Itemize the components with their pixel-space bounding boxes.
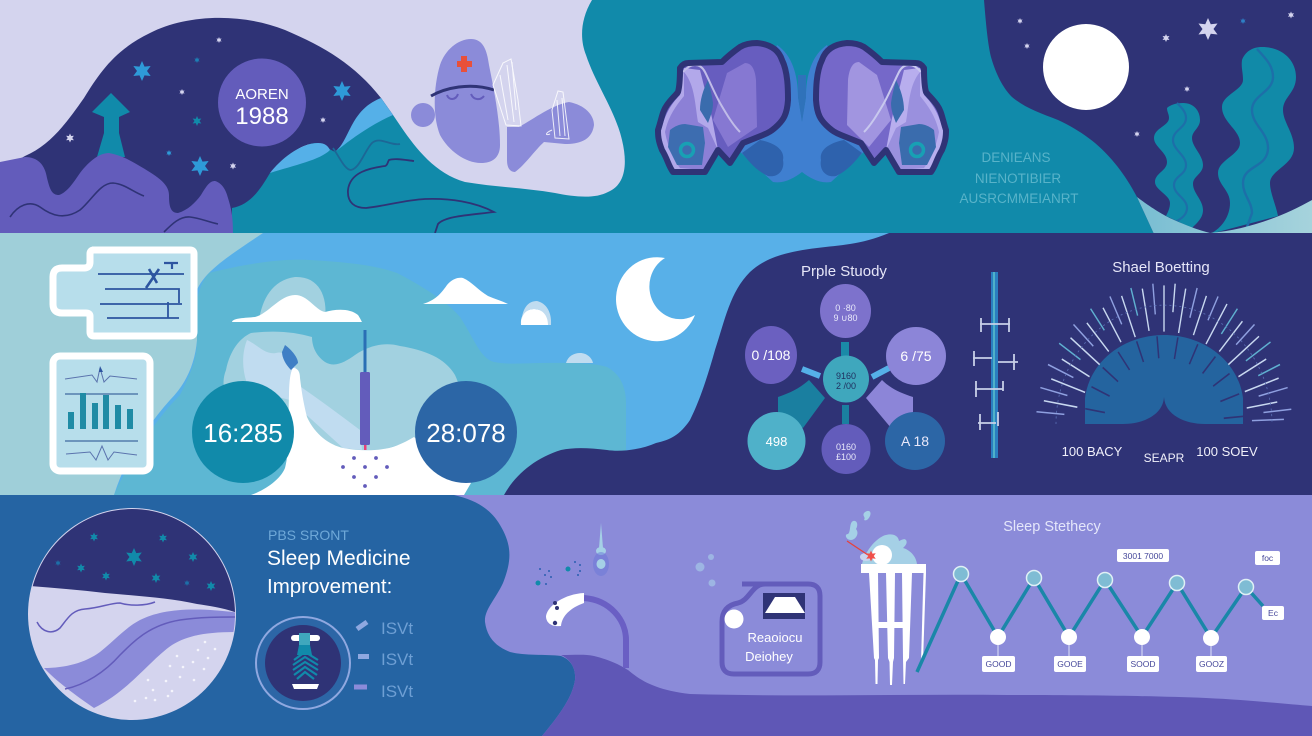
hill contour lines (10, 183, 218, 232)
stars (66, 37, 351, 176)
chart tag labels: 3001 7000 (1123, 551, 1163, 561)
icon: tower with cloud (846, 511, 926, 685)
icon: arch with white crescent (546, 593, 626, 668)
pale left region (0, 233, 263, 495)
icon: sleeping head (411, 39, 594, 172)
mid blue region (114, 260, 626, 495)
list of three items: ISVt (381, 619, 413, 638)
navy right panel (504, 233, 1312, 495)
heading: purple study: Prple Stuody (801, 263, 887, 280)
night sky stars (1017, 12, 1294, 137)
faint caption: DENIEANS (981, 150, 1051, 165)
node bottom centre: 0160 (836, 442, 856, 452)
list of three items (354, 619, 413, 701)
white body (251, 368, 471, 495)
left lobe (658, 43, 788, 172)
year badge (218, 58, 306, 146)
icon: lungs (658, 43, 946, 182)
chart tag labels: SOOD (1130, 659, 1156, 669)
node left (745, 326, 797, 384)
faint caption (959, 150, 1079, 206)
node left: 0 /108 (752, 347, 791, 363)
metric circle right (415, 381, 517, 483)
text block: sleep medicine: Improvement: (267, 575, 392, 598)
gauge labels: 100 SOEV (1196, 444, 1258, 459)
rays (1036, 284, 1291, 424)
list of three items: ISVt (381, 682, 413, 701)
teal arrow (92, 93, 130, 157)
node top: 9 ∪80 (833, 313, 858, 323)
icon: full moon (1043, 24, 1129, 110)
text block: sleep medicine: PBS SRONT (268, 527, 349, 543)
light teal dune (1137, 197, 1312, 234)
icon: ring with bottle (256, 617, 350, 709)
year badge: 1988 (235, 103, 289, 130)
lungs back shape (738, 45, 866, 182)
blue region (0, 495, 575, 736)
clouds (232, 278, 550, 325)
node bottom right (885, 412, 945, 470)
card: report (722, 584, 820, 674)
dome (1085, 335, 1243, 424)
network diagram (745, 284, 946, 474)
chart tag labels: GOOE (1057, 659, 1083, 669)
vertical scale (973, 272, 1018, 458)
bar chart panel (53, 356, 150, 471)
node centre (823, 356, 869, 402)
teal hill lines (333, 140, 494, 233)
purple foreground hills (0, 153, 233, 234)
pale blob (224, 277, 462, 470)
panel: top row night landscape (0, 0, 1312, 234)
node right: 6 /75 (900, 348, 932, 364)
heading: sleep strategy: Sleep Stethecy (1003, 519, 1102, 535)
connectors (778, 342, 913, 428)
node right (886, 327, 946, 385)
right lobe (816, 43, 946, 172)
lighter wing shape (243, 340, 362, 450)
card: report: Reaoiocu (748, 630, 802, 645)
lavender sky background (0, 0, 625, 197)
metric circle left (192, 381, 294, 483)
heading: gauge: Shael Boetting (1112, 259, 1210, 276)
node top: 0 ·80 (835, 303, 856, 313)
faint caption: NIENOTIBIER (975, 171, 1061, 186)
year badge: AOREN (235, 86, 289, 103)
icon: probe with dots (341, 330, 389, 488)
gauge labels (1062, 444, 1258, 465)
node bottom centre (822, 424, 870, 474)
icon: crescent moon (616, 257, 695, 341)
navy night sky (984, 0, 1312, 234)
node bottom left: 498 (766, 434, 787, 449)
navy hill (0, 18, 393, 234)
light blue ridge (270, 98, 393, 173)
icon: feather tip (282, 345, 298, 370)
card: report: Deiohey (745, 649, 793, 664)
node bottom centre: £100 (836, 452, 856, 462)
text block: sleep medicine: Sleep Medicine (267, 547, 411, 570)
panel: middle row sky and metrics (0, 233, 1312, 495)
chart tag labels: GOOZ (1199, 659, 1224, 669)
zigzag line chart (917, 549, 1284, 672)
seaweed (1154, 47, 1296, 234)
circular night landscape (20, 500, 240, 720)
metric circle right: 28:078 (426, 418, 506, 448)
dark purple ground (542, 655, 1312, 736)
metric circle left: 16:285 (203, 418, 283, 448)
gauge chart (1036, 284, 1291, 424)
chart tag labels: Ec (1268, 608, 1279, 618)
small pale domes (521, 301, 593, 363)
chart tag labels: foc (1262, 553, 1274, 563)
node centre: 2 /00 (836, 381, 856, 391)
node centre: 9160 (836, 371, 856, 381)
faint caption: AUSRCMMEIANRT (959, 191, 1079, 206)
icon: document panel (53, 250, 194, 336)
node top (820, 284, 871, 338)
chart tag labels: GOOD (986, 659, 1011, 669)
list of three items: ISVt (381, 650, 413, 669)
panel: bottom row (0, 495, 1312, 736)
chart tag labels (982, 549, 1284, 672)
gauge labels: 100 BACY (1062, 444, 1123, 459)
icon: droplet needle (536, 523, 716, 586)
gauge labels: SEAPR (1144, 451, 1185, 465)
text block: sleep medicine (267, 527, 411, 598)
node bottom left (748, 412, 806, 470)
node bottom right: A 18 (901, 433, 929, 449)
